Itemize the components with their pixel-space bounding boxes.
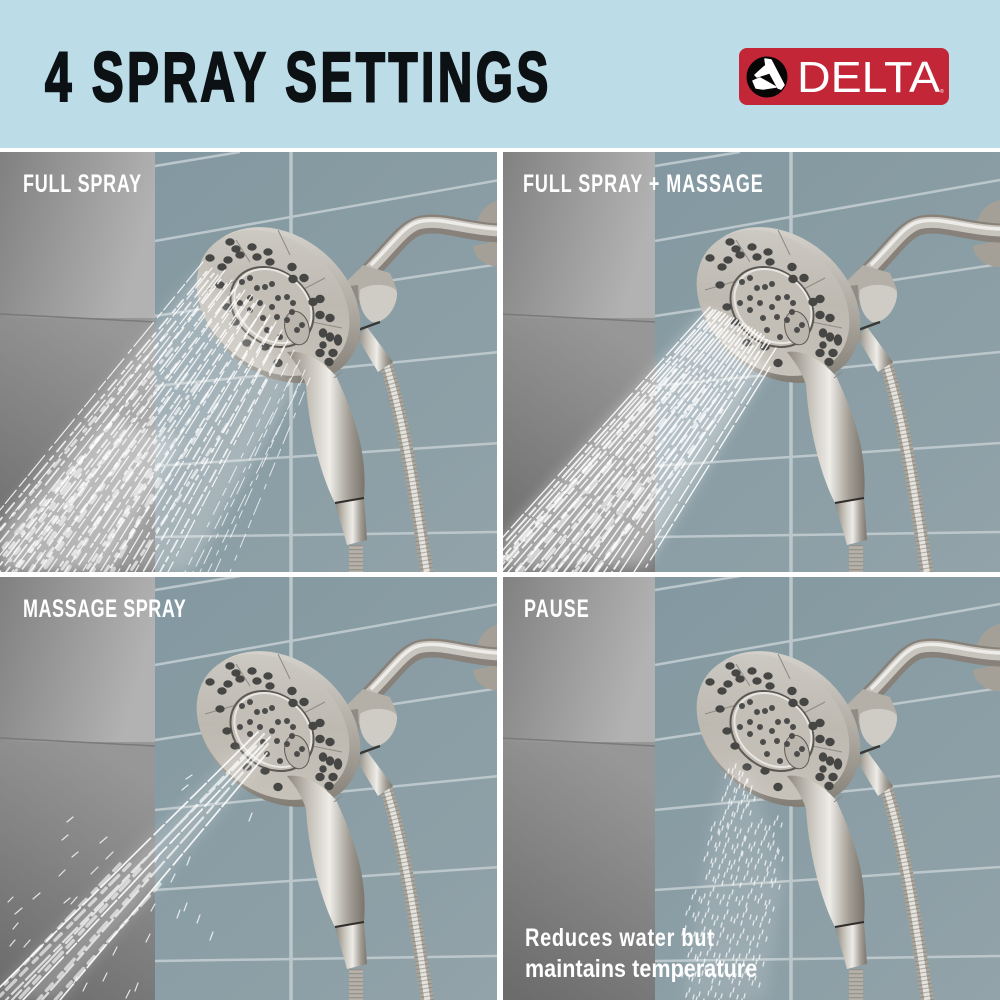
panel: massage spray xyxy=(0,577,497,1000)
water: full spray xyxy=(0,262,310,572)
note: pause description xyxy=(525,924,757,982)
panel: full spray xyxy=(0,152,497,572)
water: full spray + massage xyxy=(503,307,776,572)
Delta logo: DELTA xyxy=(797,53,941,102)
water: pause droplets xyxy=(682,764,785,1000)
Delta logo: ® xyxy=(940,88,944,95)
label: full spray: FULL SPRAY xyxy=(23,169,141,198)
note: pause description: Reduces water but xyxy=(525,924,714,952)
label: pause: PAUSE xyxy=(524,594,589,623)
label: massage spray: MASSAGE SPRAY xyxy=(23,594,186,623)
panel: full spray + massage xyxy=(503,152,1000,572)
header band xyxy=(0,0,1000,148)
panel: pause xyxy=(503,577,1000,1000)
Delta logo xyxy=(739,48,949,105)
label: full spray + massage: FULL SPRAY + MASSAGE xyxy=(523,169,763,198)
water: massage spray xyxy=(0,732,270,1000)
title: 4 SPRAY SETTINGS xyxy=(45,38,548,116)
note: pause description: maintains temperature xyxy=(525,954,757,982)
